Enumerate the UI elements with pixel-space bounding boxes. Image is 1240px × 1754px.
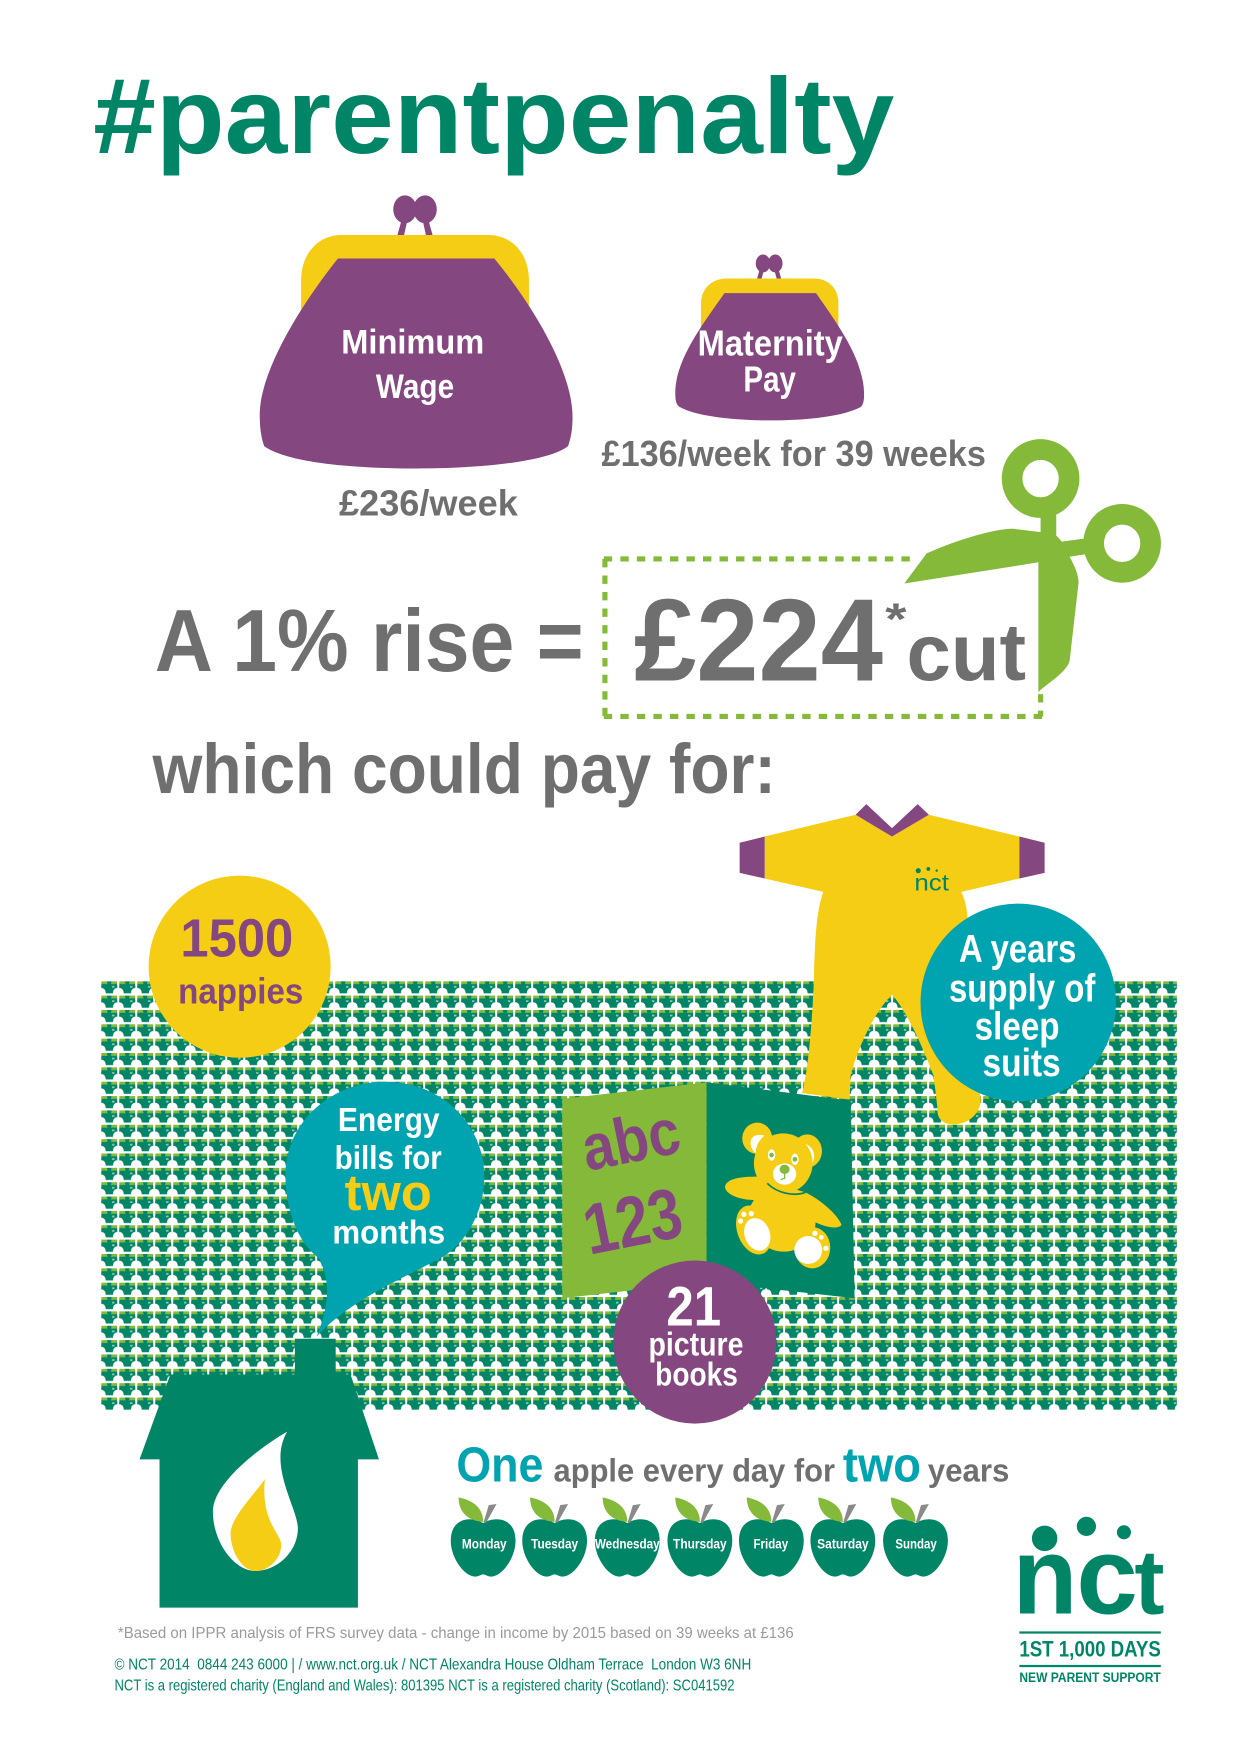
circle: sleep suits: sleep bbox=[975, 1005, 1060, 1048]
contact details: © NCT 2014 0844 243 6000 | / www.nct.org.uk / NCT Alexandra House Oldham Terrace London W3 6NH bbox=[115, 1656, 751, 1673]
circle: 1500 nappies: 1500 bbox=[180, 909, 293, 969]
icon row: seven apples: Thursday bbox=[673, 1537, 727, 1552]
nappy pattern field bbox=[101, 981, 1177, 1410]
icon: open picture book bbox=[562, 1082, 855, 1298]
label: cut: cut bbox=[907, 608, 1026, 698]
icon: sleep suit bbox=[740, 804, 1045, 1124]
speech bubble: energy bills: Energy bbox=[338, 1102, 440, 1139]
logo: NCT 1st 1,000 days: t bbox=[1134, 1532, 1165, 1634]
circle: sleep suits bbox=[921, 904, 1116, 1101]
circle: sleep suits: supply of bbox=[949, 967, 1096, 1010]
circle: sleep suits: A years bbox=[959, 928, 1076, 971]
icon: open picture book: abc bbox=[575, 1094, 686, 1185]
footnote: *Based on IPPR analysis of FRS survey data - change in income by 2015 based on 39 weeks at £136 bbox=[118, 1625, 794, 1642]
footnote asterisk: * bbox=[885, 595, 907, 644]
icon row: seven apples: Saturday bbox=[817, 1537, 869, 1552]
circle: 1500 nappies bbox=[149, 876, 331, 1058]
circle: 21 picture books: 21 bbox=[666, 1274, 721, 1337]
label: minimum wage amount: £236/week bbox=[339, 483, 518, 523]
icon row: seven apples: Monday bbox=[462, 1537, 507, 1552]
title: #parentpenalty bbox=[93, 56, 895, 176]
icon row: seven apples: Tuesday bbox=[531, 1537, 579, 1552]
circle: 21 picture books bbox=[613, 1261, 776, 1424]
subheading: which could pay for: bbox=[152, 729, 776, 808]
icon: sleep suit: nct bbox=[914, 870, 950, 896]
icon row: seven apples: Friday bbox=[753, 1537, 789, 1552]
icon row: seven apples bbox=[451, 1497, 948, 1577]
contact details bbox=[115, 1656, 751, 1695]
label: maternity pay amount: £136/week for 39 weeks bbox=[602, 434, 986, 474]
speech bubble: energy bills: bills for bbox=[335, 1140, 442, 1177]
icon: house with gas flame bbox=[140, 1339, 379, 1608]
icon: minimum wage purse: Minimum bbox=[341, 323, 484, 361]
contact details: NCT is a registered charity (England and Wales): 801395 NCT is a registered charity (Scotland): SC041592 bbox=[115, 1678, 735, 1695]
logo: NCT 1st 1,000 days bbox=[1013, 1516, 1165, 1685]
logo: NCT 1st 1,000 days: NEW PARENT SUPPORT bbox=[1019, 1669, 1161, 1685]
icon: maternity pay purse: Maternity bbox=[698, 324, 843, 364]
circle: 21 picture books: picture bbox=[648, 1326, 743, 1363]
heading: one apple every day bbox=[456, 1439, 1009, 1493]
icon: maternity pay purse bbox=[675, 255, 864, 420]
icon: open picture book: 123 bbox=[577, 1173, 689, 1271]
circle: 1500 nappies: nappies bbox=[178, 972, 303, 1012]
icon: maternity pay purse: Pay bbox=[743, 359, 796, 399]
speech bubble: energy bills bbox=[285, 1082, 484, 1336]
logo: NCT 1st 1,000 days: n bbox=[1013, 1516, 1077, 1638]
logo: NCT 1st 1,000 days: c bbox=[1076, 1516, 1138, 1638]
equation: one percent rise: A 1% rise = bbox=[155, 591, 584, 690]
circle: sleep suits: suits bbox=[983, 1042, 1061, 1085]
icon: scissors bbox=[904, 449, 1151, 692]
heading: one apple every day: apple every day for bbox=[554, 1453, 835, 1489]
icon row: seven apples: Sunday bbox=[895, 1537, 937, 1552]
icon: teddy bear bbox=[725, 1123, 842, 1268]
heading: one apple every day: two bbox=[843, 1439, 921, 1493]
circle: 21 picture books: books bbox=[655, 1357, 738, 1394]
amount: 224 pounds: £224 bbox=[634, 574, 883, 705]
logo: NCT 1st 1,000 days: 1ST 1,000 DAYS bbox=[1019, 1637, 1161, 1662]
icon: minimum wage purse bbox=[260, 195, 573, 468]
icon row: seven apples: Wednesday bbox=[595, 1537, 660, 1552]
speech bubble: energy bills: months bbox=[332, 1215, 445, 1252]
heading: one apple every day: years bbox=[928, 1453, 1009, 1489]
callout: dashed cut box bbox=[604, 559, 1043, 716]
icon: minimum wage purse: Wage bbox=[376, 368, 454, 406]
heading: one apple every day: One bbox=[456, 1439, 543, 1493]
speech bubble: energy bills: two bbox=[345, 1163, 432, 1221]
